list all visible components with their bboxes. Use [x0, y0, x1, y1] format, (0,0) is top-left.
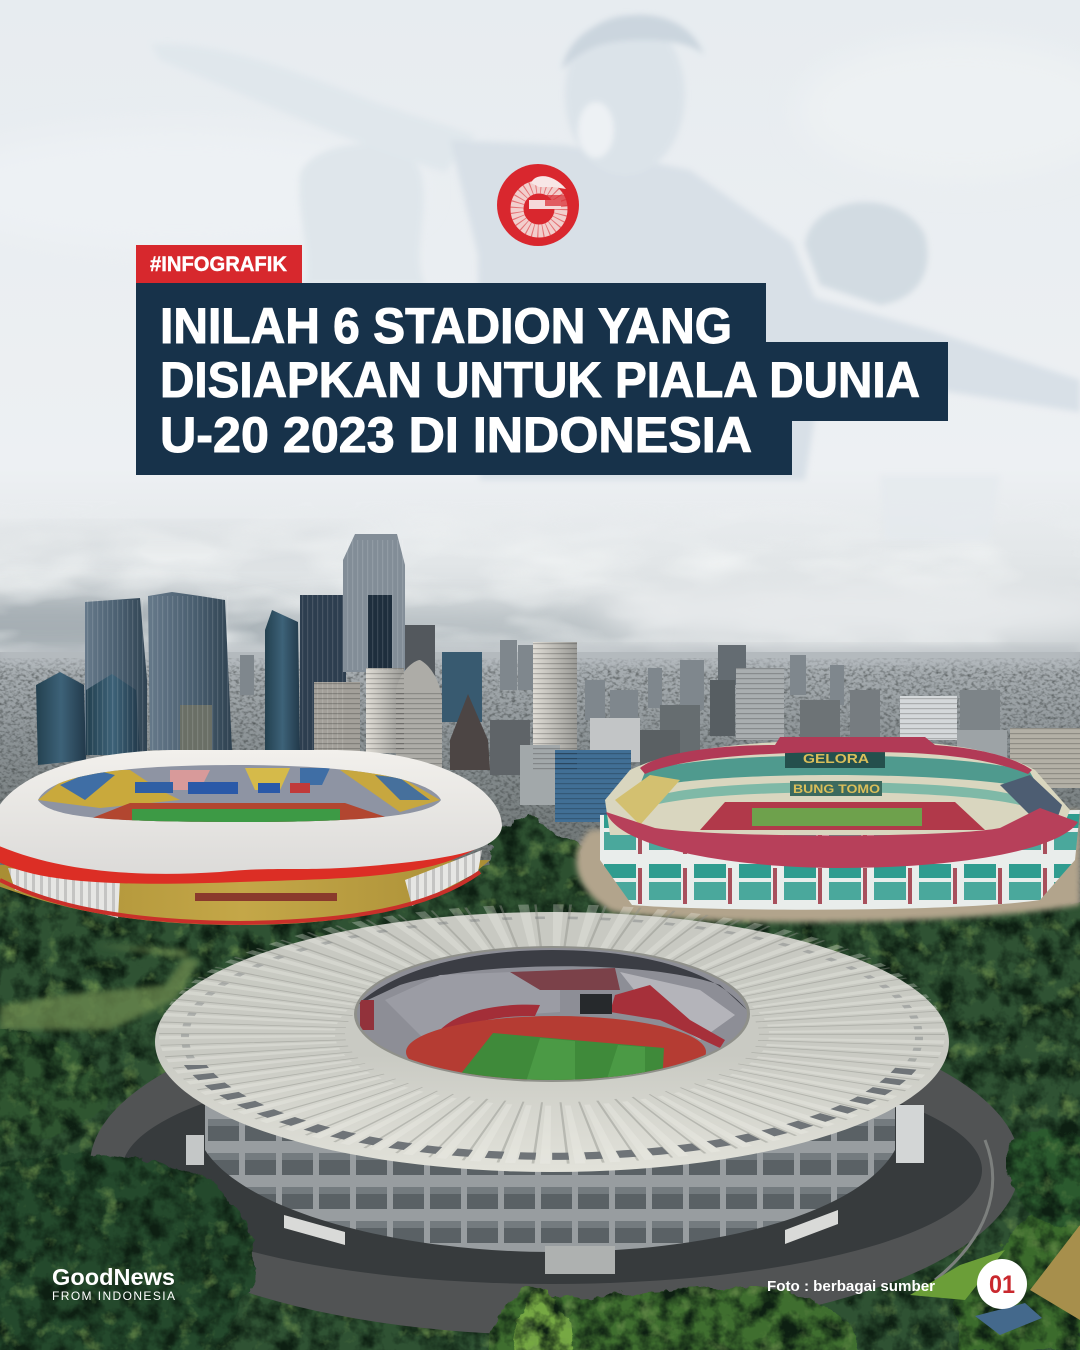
- running track: [406, 1016, 706, 1080]
- page number badge: [977, 1259, 1027, 1309]
- entrance canopies: [284, 1215, 345, 1245]
- lower red trim: [0, 872, 480, 923]
- title block: [136, 283, 948, 475]
- glass towers left: [85, 598, 147, 755]
- red seat blocks: [441, 1004, 540, 1029]
- stand rows teal: [638, 756, 1040, 790]
- white seat bays: [386, 972, 560, 1036]
- stadium name sign: [195, 893, 337, 901]
- brand logo text: FROM INDONESIA: [52, 1289, 175, 1303]
- tunnel: [580, 994, 612, 1014]
- roof red band: [0, 820, 498, 884]
- title block: INILAH 6 STADION YANG: [160, 298, 732, 354]
- facade white side panels: [8, 868, 120, 918]
- brand logo text: GoodNews: [52, 1264, 175, 1290]
- logo badge: [497, 164, 579, 246]
- pitch: [462, 1033, 664, 1080]
- bottom-right lawn and building: [910, 1128, 1080, 1350]
- stadium: right Gelora Bung Tomo: [576, 737, 1080, 922]
- facade gold: [0, 860, 490, 925]
- title block: DISIAPKAN UNTUK PIALA DUNIA: [160, 352, 920, 408]
- ring road and plaza: [90, 995, 1020, 1335]
- roof vents: front row: [184, 1065, 916, 1160]
- track: [700, 802, 985, 830]
- sign: BUNG TOMO: BUNG TOMO: [793, 782, 880, 796]
- centre board: [785, 748, 885, 768]
- brand logo text: [52, 1264, 175, 1303]
- sign: GELORA: GELORA: [803, 751, 870, 766]
- colored seats: [38, 770, 180, 808]
- tower facade lines: [85, 540, 1080, 822]
- roof white: [0, 750, 502, 874]
- roof disc: [155, 912, 949, 1172]
- player: main body jersey: [450, 140, 1080, 480]
- ground trees: [0, 870, 1080, 1350]
- upper roof: [640, 737, 1032, 774]
- hashtag tag: #INFOGRAFIK: [150, 253, 287, 276]
- track: [82, 803, 400, 822]
- player: right background head: [805, 202, 928, 305]
- foreground trees bottom-left: [0, 1029, 255, 1350]
- ad boards: [135, 782, 173, 793]
- upper stand back: [605, 740, 1070, 835]
- pitch: [752, 808, 922, 826]
- lower roof: [606, 808, 1078, 868]
- facade: [600, 810, 1080, 910]
- photo credit: Foto : berbagai sumber: [767, 1278, 935, 1295]
- upper dark tier: [357, 950, 747, 1010]
- trees between stadiums: [490, 815, 585, 920]
- distant towers: [240, 640, 1000, 770]
- city skyline: [0, 534, 1080, 912]
- player: left background head: [299, 144, 425, 285]
- stadium bowl: [350, 945, 750, 1088]
- title block: U-20 2023 DI INDONESIA: [160, 407, 752, 463]
- page number badge: 01: [989, 1271, 1015, 1299]
- player: main arm raised: [152, 44, 475, 172]
- bowl interior: [38, 765, 441, 822]
- foreground trees bottom-centre: [485, 1289, 855, 1350]
- stadium: Gelora Bung Karno main: [155, 912, 949, 1274]
- roof radial ribs: [247, 933, 857, 1135]
- facade grid: [200, 1100, 900, 1255]
- roof inner shadow: [354, 946, 750, 1082]
- ring path white strip: [935, 1140, 993, 1280]
- ghost photo: celebrating players: [152, 15, 1080, 540]
- city haze ground: [0, 652, 1080, 912]
- hashtag tag: [136, 245, 302, 283]
- pitch: [132, 809, 340, 822]
- player: main head: [562, 15, 704, 175]
- dirt apron: [576, 810, 1080, 922]
- lawn near left stadium: [0, 945, 200, 1030]
- sky background: [0, 519, 1080, 652]
- stadium: left with white roof: [0, 750, 502, 925]
- roof vents: all around: [185, 918, 919, 1156]
